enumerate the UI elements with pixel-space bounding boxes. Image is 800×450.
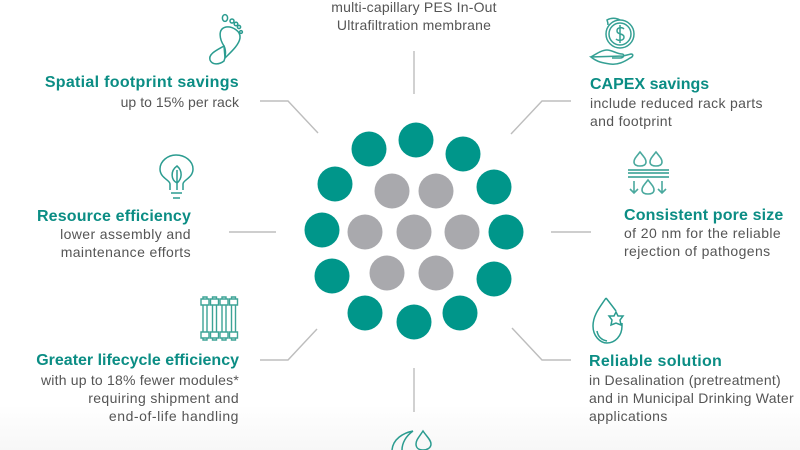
panel: spatial footprint savings: Spatial footprint savings: [45, 74, 239, 91]
icon: pore filter with drops: [628, 152, 669, 194]
icon: light bulb with leaf: [160, 155, 193, 198]
top text block: Ultrafiltration membrane: [337, 17, 491, 33]
connector lines: [229, 51, 591, 412]
panel: greater lifecycle efficiency: [36, 352, 239, 424]
panel: CAPEX savings: and footprint: [590, 113, 672, 129]
panel: reliable solution: Reliable solution: [589, 353, 722, 370]
icon: leaf and drop: [392, 431, 431, 450]
panel: spatial footprint savings: up to 15% per rack: [121, 94, 239, 110]
panel: greater lifecycle efficiency: Greater lifecycle efficiency: [36, 352, 239, 369]
panel: CAPEX savings: [590, 76, 763, 129]
panel: CAPEX savings: CAPEX savings: [590, 76, 709, 93]
panel: consistent pore size: [624, 207, 783, 259]
panel: resource efficiency: [37, 208, 191, 260]
panel: greater lifecycle efficiency: with up to 18% fewer modules*: [41, 372, 239, 388]
panel: spatial footprint savings: [45, 74, 239, 110]
panel: resource efficiency: maintenance efforts: [61, 244, 191, 260]
icon: membrane modules: [201, 297, 238, 340]
icon: coins and hand: [591, 18, 634, 64]
panel: reliable solution: and in Municipal Drinking Water: [589, 390, 794, 406]
panel: consistent pore size: of 20 nm for the reliable: [624, 225, 781, 241]
panel: greater lifecycle efficiency: requiring shipment and: [88, 390, 239, 406]
panel: resource efficiency: lower assembly and: [60, 226, 191, 242]
panel: consistent pore size: Consistent pore size: [624, 207, 783, 224]
panel: greater lifecycle efficiency: end-of-life handling: [109, 408, 239, 424]
panel: CAPEX savings: include reduced rack parts: [590, 95, 763, 111]
icon: footprint: [210, 15, 242, 64]
panel: resource efficiency: Resource efficiency: [37, 208, 191, 225]
panel: reliable solution: applications: [589, 408, 668, 424]
top text block: [331, 0, 497, 33]
icon: water drop with star: [593, 298, 623, 343]
membrane cross-section circles: [304, 122, 524, 340]
panel: reliable solution: [589, 353, 794, 424]
panel: reliable solution: in Desalination (pretreatment): [589, 372, 781, 388]
panel: consistent pore size: rejection of pathogens: [624, 243, 771, 259]
